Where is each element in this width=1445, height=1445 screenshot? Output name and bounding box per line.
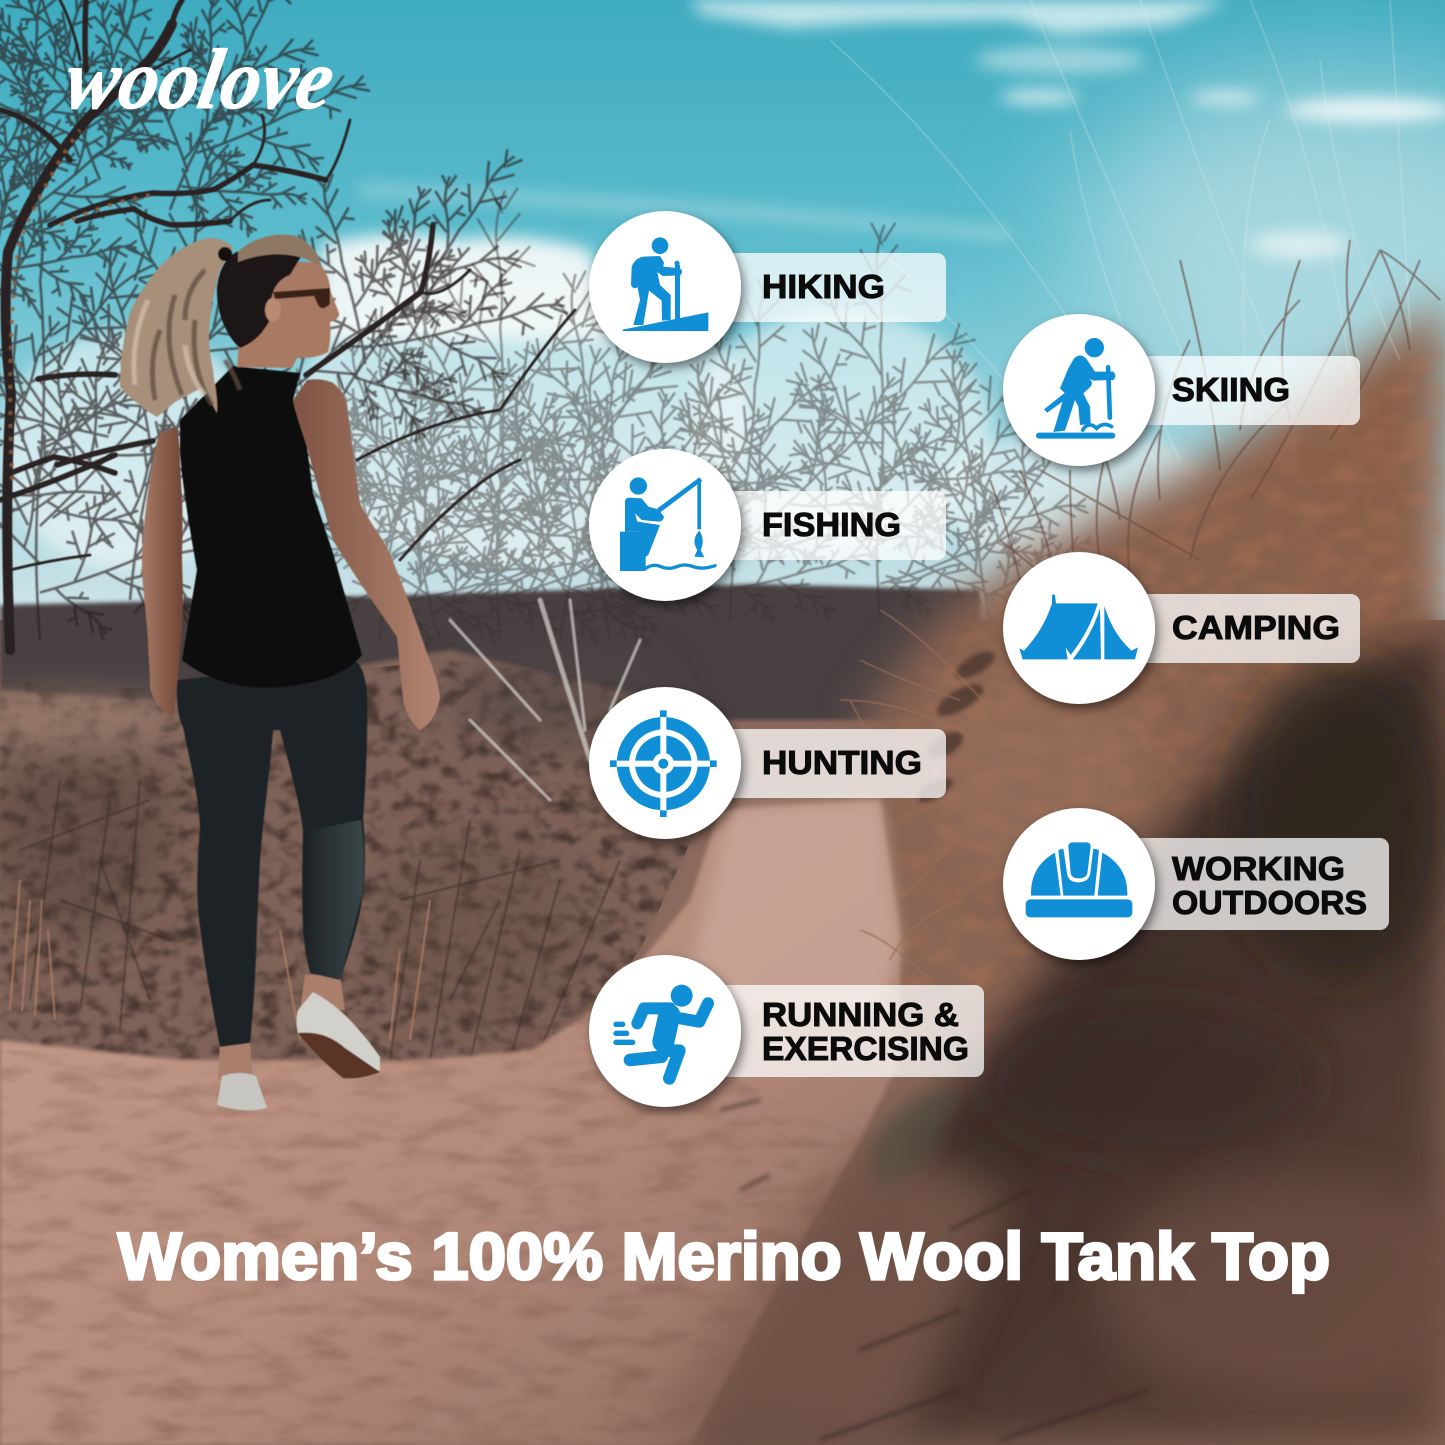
- icon: fisherman: [620, 477, 715, 571]
- icon circle: [1003, 314, 1155, 466]
- label pill: [1114, 838, 1389, 930]
- label pill: [700, 985, 984, 1077]
- label: HIKING: [762, 268, 885, 305]
- label: SKIING: [1172, 371, 1290, 408]
- icon: hard hat: [1026, 842, 1132, 917]
- orange flecks on trunk: [10, 130, 150, 480]
- grassy bank: [860, 300, 1445, 1110]
- icon: crosshair target: [610, 710, 717, 817]
- sunglasses: [273, 288, 330, 308]
- icon circle: [1003, 808, 1155, 960]
- activity: hiking: [589, 211, 946, 363]
- calf highlight: [303, 820, 364, 980]
- icon circle: [589, 449, 741, 601]
- ankles: [218, 975, 345, 1080]
- grass blades pale: [830, 0, 1410, 500]
- icon: runner: [616, 985, 708, 1078]
- leggings: [177, 662, 367, 1047]
- left trees fine twigs: [0, 0, 665, 682]
- sand to bank blend: [640, 1130, 1010, 1445]
- left sneaker: [217, 1073, 267, 1110]
- dark hair: [217, 242, 305, 348]
- label: RUNNING &: [762, 996, 959, 1033]
- shrub twigs: [20, 780, 620, 1060]
- distant tree line: [0, 584, 980, 720]
- icon: hiker: [623, 237, 708, 331]
- hair strands: [152, 270, 240, 405]
- label pill: [700, 729, 946, 798]
- tank top: [180, 366, 362, 688]
- hair tie: [218, 247, 232, 261]
- activity: working outdoors: [1003, 808, 1389, 960]
- label pill: [1114, 594, 1360, 663]
- activity: skiing: [1003, 314, 1360, 466]
- label: CAMPING: [1172, 609, 1340, 646]
- activity: camping: [1003, 552, 1360, 704]
- right sneaker: [296, 992, 380, 1078]
- left tree main limbs: [0, 0, 575, 650]
- trail sand: [0, 800, 900, 1445]
- dark streaks on bank: [720, 1100, 1150, 1440]
- activity: hunting: [589, 687, 946, 839]
- label: WORKING: [1172, 850, 1345, 887]
- left arm: [142, 427, 183, 717]
- hair highlights: [238, 234, 322, 268]
- dark tufts on bank edge: [914, 628, 1040, 807]
- sky: [0, 0, 1445, 620]
- neck and face: [237, 262, 339, 368]
- icon circle: [589, 955, 741, 1107]
- label pill: [700, 253, 946, 322]
- icon: skier: [1036, 338, 1115, 439]
- icon circle: [1003, 552, 1155, 704]
- right arm: [293, 379, 440, 730]
- ear: [265, 298, 281, 322]
- activity: fishing: [589, 449, 946, 601]
- icon circle: [589, 211, 741, 363]
- birch trunks: [450, 600, 650, 800]
- activity: running and exercising: [589, 955, 984, 1107]
- pale haze upper right: [1070, 70, 1445, 410]
- title: Women’s 100% Merino Wool Tank Top: [118, 1219, 1330, 1293]
- dirt bank: [680, 620, 1445, 1445]
- grass blades rust: [990, 240, 1440, 640]
- icon: tent: [1019, 594, 1138, 659]
- icon circle: [589, 687, 741, 839]
- twiggy mid trees: [124, 188, 1159, 702]
- label: OUTDOORS: [1172, 884, 1367, 921]
- ponytail: [120, 238, 233, 417]
- label pill: [700, 491, 946, 560]
- shrubs: [0, 650, 710, 1060]
- label: EXERCISING: [762, 1030, 969, 1067]
- label: FISHING: [762, 506, 901, 543]
- woman walking: [120, 234, 440, 1110]
- label: HUNTING: [762, 744, 922, 781]
- logo: woolove: woolove: [59, 32, 341, 127]
- clouds: [0, 0, 1445, 570]
- label pill: [1114, 356, 1360, 425]
